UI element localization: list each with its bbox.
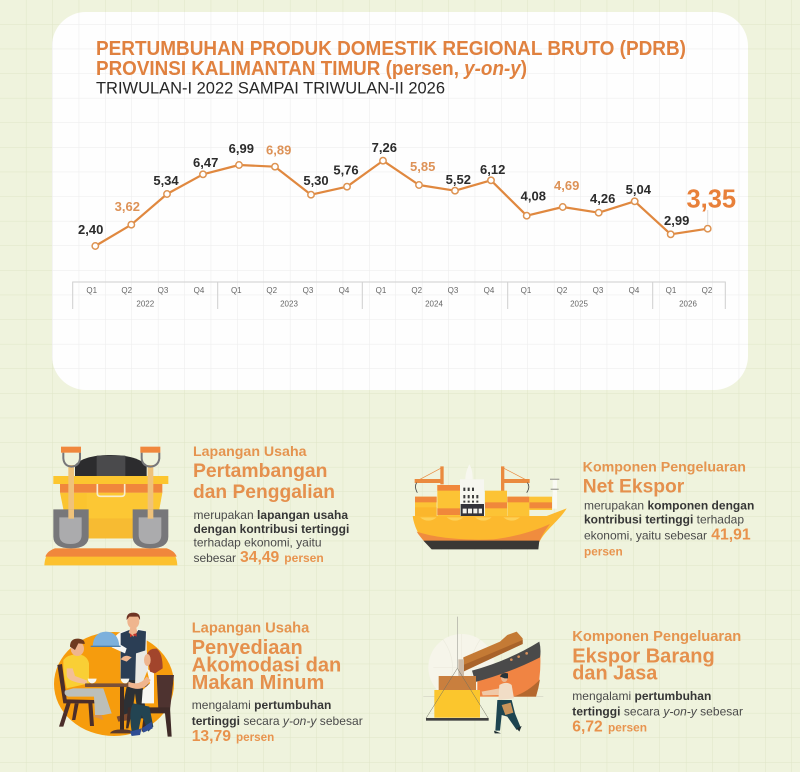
category axis: Q2 xyxy=(411,286,423,295)
category axis: 2022 xyxy=(136,300,155,308)
data labels: 5,76 xyxy=(333,162,359,178)
data labels xyxy=(78,140,689,237)
category axis: Q1 xyxy=(376,286,387,295)
text block: Ekspor Barang dan Jasa: Ekspor Barang xyxy=(572,646,715,668)
text block: Penyediaan Akomodasi dan Makan Minum: 13,79 xyxy=(192,728,231,745)
data labels: 6,89 xyxy=(266,142,291,158)
data labels: 4,08 xyxy=(521,188,546,204)
data labels: 6,99 xyxy=(229,141,254,156)
icon: export ship and worker xyxy=(423,617,543,733)
category axis: Q1 xyxy=(666,286,677,295)
text block: Pertambangan dan Penggalian: sebesar xyxy=(194,551,236,565)
category axis: Q3 xyxy=(303,286,314,295)
text block: Penyediaan Akomodasi dan Makan Minum: persen xyxy=(236,730,274,744)
category axis: Q3 xyxy=(593,286,604,295)
title: PERTUMBUHAN PRODUK DOMESTIK REGIONAL BRUTO (PDRB) xyxy=(96,38,686,60)
text block: Net Ekspor: Komponen Pengeluaran xyxy=(583,460,746,476)
text block: Ekspor Barang dan Jasa: Komponen Pengeluaran xyxy=(572,629,741,645)
line chart: PDRB growth xyxy=(73,140,736,309)
text block: Pertambangan dan Penggalian: Lapangan Usaha xyxy=(193,444,307,460)
icon: cargo ship xyxy=(413,464,567,549)
category axis: Q1 xyxy=(521,286,532,295)
category axis: Q4 xyxy=(629,286,640,295)
category axis: Q2 xyxy=(557,286,568,295)
category axis: 2024 xyxy=(425,300,443,308)
text block: Ekspor Barang dan Jasa: tertinggi secara y-on-y sebesar xyxy=(572,705,743,719)
category axis xyxy=(73,282,725,309)
data labels: 5,34 xyxy=(153,173,179,188)
category axis: Q2 xyxy=(266,286,278,295)
title: PROVINSI KALIMANTAN TIMUR (persen, y-on-y) xyxy=(96,58,527,80)
data labels: 6,47 xyxy=(193,155,218,170)
highlighted latest value: 3,35 xyxy=(686,186,736,214)
text block: Penyediaan Akomodasi dan Makan Minum xyxy=(192,620,363,745)
category axis: 2023 xyxy=(280,300,298,308)
text block: Penyediaan Akomodasi dan Makan Minum: Penyediaan xyxy=(192,637,303,659)
text block: Ekspor Barang dan Jasa: dan Jasa xyxy=(572,662,658,684)
text block: Pertambangan dan Penggalian: dan Penggalian xyxy=(193,481,335,503)
data labels: 4,69 xyxy=(554,178,579,193)
icon: mining cart with shovels xyxy=(44,447,177,565)
data labels: 7,26 xyxy=(372,140,397,155)
panel: chart card xyxy=(52,12,748,390)
title: TRIWULAN-I 2022 SAMPAI TRIWULAN-II 2026 xyxy=(96,78,445,98)
text block: Pertambangan dan Penggalian: terhadap ekonomi, yaitu xyxy=(194,536,322,550)
data labels: 4,26 xyxy=(590,191,615,206)
text block: Pertambangan dan Penggalian: Pertambangan xyxy=(193,460,328,482)
text block: Ekspor Barang dan Jasa: 6,72 xyxy=(572,719,603,736)
icon: restaurant scene xyxy=(54,613,174,737)
data labels: 5,52 xyxy=(446,172,471,187)
text block: Net Ekspor: Net Ekspor xyxy=(583,476,685,498)
text block: Ekspor Barang dan Jasa: mengalami pertumbuhan xyxy=(572,689,711,703)
series line xyxy=(95,161,708,246)
category axis: 2025 xyxy=(570,300,588,308)
text block: Penyediaan Akomodasi dan Makan Minum: tertinggi secara y-on-y sebesar xyxy=(192,714,363,728)
data labels: 2,40 xyxy=(78,222,103,237)
data labels: 5,04 xyxy=(626,182,652,197)
category axis: Q4 xyxy=(484,286,495,295)
text block: Ekspor Barang dan Jasa xyxy=(572,629,743,736)
text block: Penyediaan Akomodasi dan Makan Minum: mengalami pertumbuhan xyxy=(192,698,331,712)
text block: Penyediaan Akomodasi dan Makan Minum: Akomodasi dan xyxy=(192,654,341,676)
data labels: 5,85 xyxy=(410,159,435,174)
data labels: 3,62 xyxy=(115,199,140,214)
category axis: Q1 xyxy=(86,286,98,295)
category axis: Q2 xyxy=(702,286,713,295)
category axis: 2026 xyxy=(679,300,697,308)
text block: Net Ekspor: ekonomi, yaitu sebesar xyxy=(584,528,707,542)
text block: Net Ekspor: 41,91 xyxy=(711,526,751,543)
category axis: Q2 xyxy=(121,286,133,295)
text block: Pertambangan dan Penggalian: persen xyxy=(284,551,324,565)
category axis: Q1 xyxy=(231,286,242,295)
text block: Penyediaan Akomodasi dan Makan Minum: Lapangan Usaha xyxy=(192,620,310,636)
text block: Net Ekspor: persen xyxy=(584,544,623,558)
title xyxy=(96,38,686,98)
data labels: 6,12 xyxy=(480,162,505,177)
text block: Net Ekspor: merupakan komponen dengan xyxy=(584,499,754,513)
category axis: Q4 xyxy=(194,286,205,295)
text block: Ekspor Barang dan Jasa: persen xyxy=(608,721,647,735)
text block: Penyediaan Akomodasi dan Makan Minum: Makan Minum xyxy=(192,672,324,694)
text block: Pertambangan dan Penggalian: merupakan lapangan usaha xyxy=(194,508,348,522)
category axis: Q3 xyxy=(158,286,169,295)
category axis: Q4 xyxy=(339,286,350,295)
data labels: 5,30 xyxy=(303,173,329,188)
data points xyxy=(92,158,711,249)
category axis: Q3 xyxy=(448,286,459,295)
text block: Net Ekspor xyxy=(583,460,754,558)
text block: Pertambangan dan Penggalian: 34,49 xyxy=(240,549,279,566)
text block: Pertambangan dan Penggalian: dengan kontribusi tertinggi xyxy=(194,522,349,536)
text block: Pertambangan dan Penggalian xyxy=(193,444,349,566)
text block: Net Ekspor: kontribusi tertinggi terhadap xyxy=(584,512,744,526)
data labels: 2,99 xyxy=(664,213,689,228)
